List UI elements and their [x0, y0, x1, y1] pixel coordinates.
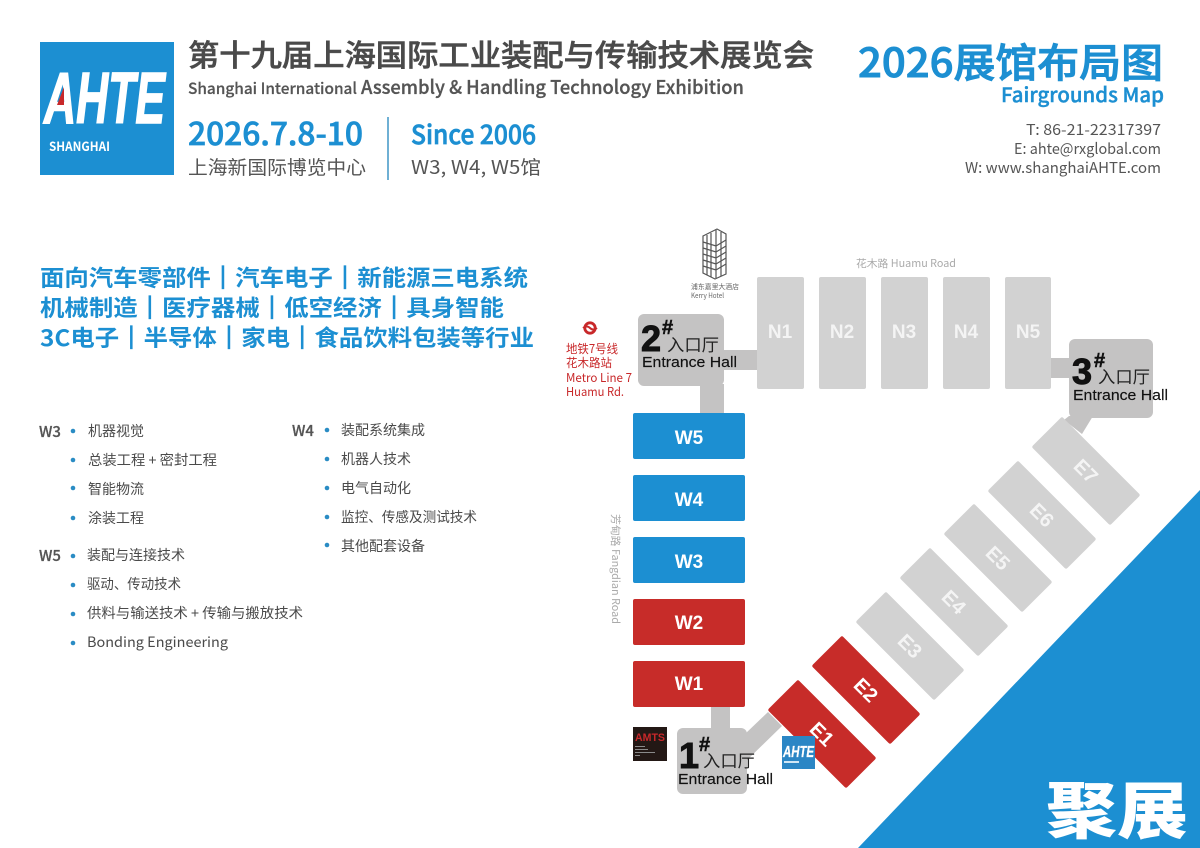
list: W4: 其他配套设备	[341, 536, 425, 556]
industries headline: 机械制造 ｜医疗器械 ｜低空经济 ｜具身智能	[40, 291, 504, 323]
since and halls	[411, 115, 541, 180]
contact details: W: www.shanghaiAHTE.com	[965, 157, 1161, 178]
title: Chinese exhibition name: 第十九届上海国际工业装配与传输技术展览会	[188, 31, 814, 75]
east halls: E2	[849, 674, 882, 707]
map title: 2026展馆布局图	[858, 31, 1163, 89]
west halls	[633, 413, 745, 707]
west halls: W1	[675, 674, 704, 695]
north halls: N1	[768, 322, 793, 343]
east halls: E4	[937, 586, 970, 620]
east halls: E5	[981, 542, 1014, 575]
logo: AMTS marker	[633, 727, 667, 761]
west halls: W5	[675, 428, 704, 449]
list: W3: 机器视觉	[88, 421, 144, 441]
list: W5: 装配与连接技术	[87, 545, 185, 565]
west halls: W3	[675, 552, 703, 573]
date and venue	[188, 109, 366, 180]
metro station: 地铁7号线	[566, 340, 618, 357]
north halls: N5	[1016, 322, 1041, 343]
logo: AHTE marker: AHTE	[782, 744, 815, 761]
east halls: E1	[805, 718, 838, 751]
list: W4	[292, 420, 477, 556]
logo: AMTS marker: AMTS	[635, 732, 665, 744]
since and halls: Since 2006	[411, 115, 536, 152]
north halls: N2	[830, 322, 854, 343]
list: W4: 电气自动化	[341, 478, 411, 498]
entrance hall 1: #	[699, 734, 710, 756]
west halls: W4	[675, 490, 704, 511]
entrance hall 3: Entrance Hall	[1073, 387, 1168, 404]
icon: Kerry Hotel: 浦东嘉里大酒店	[691, 282, 739, 292]
divider	[387, 117, 389, 180]
entrance hall 2: 入口厅	[667, 331, 719, 356]
north halls: N3	[892, 322, 916, 343]
list: W3: 涂装工程	[88, 508, 144, 528]
list: W3: 总装工程 + 密封工程	[88, 450, 217, 470]
logo: AHTE Shanghai: AHTE	[43, 59, 166, 139]
list: W3: W3	[39, 421, 61, 442]
contact details: T: 86-21-22317397	[1026, 119, 1161, 140]
icon: Kerry Hotel: Kerry Hotel	[691, 291, 724, 301]
entrance hall 2	[638, 314, 737, 386]
entrance hall 1: Entrance Hall	[678, 771, 773, 788]
industries headline	[40, 261, 534, 353]
road label: Huamu Road: 花木路 Huamu Road	[856, 256, 956, 271]
logo: AHTE Shanghai	[40, 42, 174, 175]
west halls: W2	[675, 613, 703, 634]
industries headline: 面向汽车零部件 ｜汽车电子 ｜新能源三电系统	[40, 261, 528, 293]
metro station: Metro Line 7	[566, 369, 632, 386]
entrance hall 3: #	[1094, 350, 1105, 372]
contact details: E: ahte@rxglobal.com	[1014, 138, 1161, 159]
metro station: Huamu Rd.	[566, 383, 624, 400]
map title: Fairgrounds Map	[1001, 79, 1164, 108]
list: W4: 监控、传感及测试技术	[341, 507, 477, 527]
list: W5: Bonding Engineering	[87, 632, 228, 652]
metro station	[566, 323, 632, 400]
east halls: E6	[1025, 499, 1058, 532]
road label: Fangdian Road: 芳甸路 Fangdian Road	[608, 514, 623, 624]
entrance hall 1	[677, 728, 773, 794]
entrance hall 3: 入口厅	[1098, 363, 1150, 388]
industries headline: 3C电子 ｜半导体 ｜家电｜食品饮料包装等行业	[40, 321, 534, 353]
date and venue: 上海新国际博览中心	[188, 153, 366, 180]
entrance hall 2: #	[662, 317, 673, 339]
entrance hall 2: Entrance Hall	[642, 354, 737, 371]
entrance hall 3	[1069, 339, 1168, 418]
title: English exhibition name	[188, 73, 744, 100]
north halls	[757, 277, 1051, 389]
list: W5: W5	[39, 545, 61, 566]
list: W5	[39, 545, 303, 652]
list: W3: 智能物流	[88, 479, 144, 499]
entrance hall 1: 入口厅	[703, 747, 755, 772]
list: W4: W4	[292, 420, 314, 441]
east halls: E3	[893, 630, 926, 663]
contact details	[965, 119, 1161, 178]
east halls	[768, 417, 1140, 788]
east halls: E7	[1069, 455, 1102, 488]
icon: Kerry Hotel	[691, 229, 739, 301]
north halls: N4	[954, 322, 979, 343]
list: W4: 装配系统集成	[341, 420, 425, 440]
corner triangle	[858, 490, 1200, 848]
title: English exhibition name: Assembly & Handling Technology Exhibition	[361, 73, 744, 100]
logo: AHTE Shanghai: SHANGHAI	[49, 136, 110, 155]
entrance hall 2: 2	[641, 318, 661, 359]
date and venue: 2026.7.8-10	[188, 109, 363, 154]
logo: AHTE marker	[782, 736, 815, 769]
entrance hall 3: 3	[1072, 351, 1092, 392]
entrance hall 1: 1	[679, 735, 699, 776]
list: W5: 驱动、传动技术	[87, 574, 181, 594]
list: W5: 供料与输送技术 + 传输与搬放技术	[87, 603, 303, 623]
metro station: 花木路站	[566, 354, 612, 371]
connectors	[700, 350, 1093, 762]
list: W3	[39, 421, 217, 528]
list: W4: 机器人技术	[341, 449, 411, 469]
title: English exhibition name: Shanghai International	[188, 77, 357, 99]
since and halls: W3, W4, W5馆	[411, 153, 541, 180]
